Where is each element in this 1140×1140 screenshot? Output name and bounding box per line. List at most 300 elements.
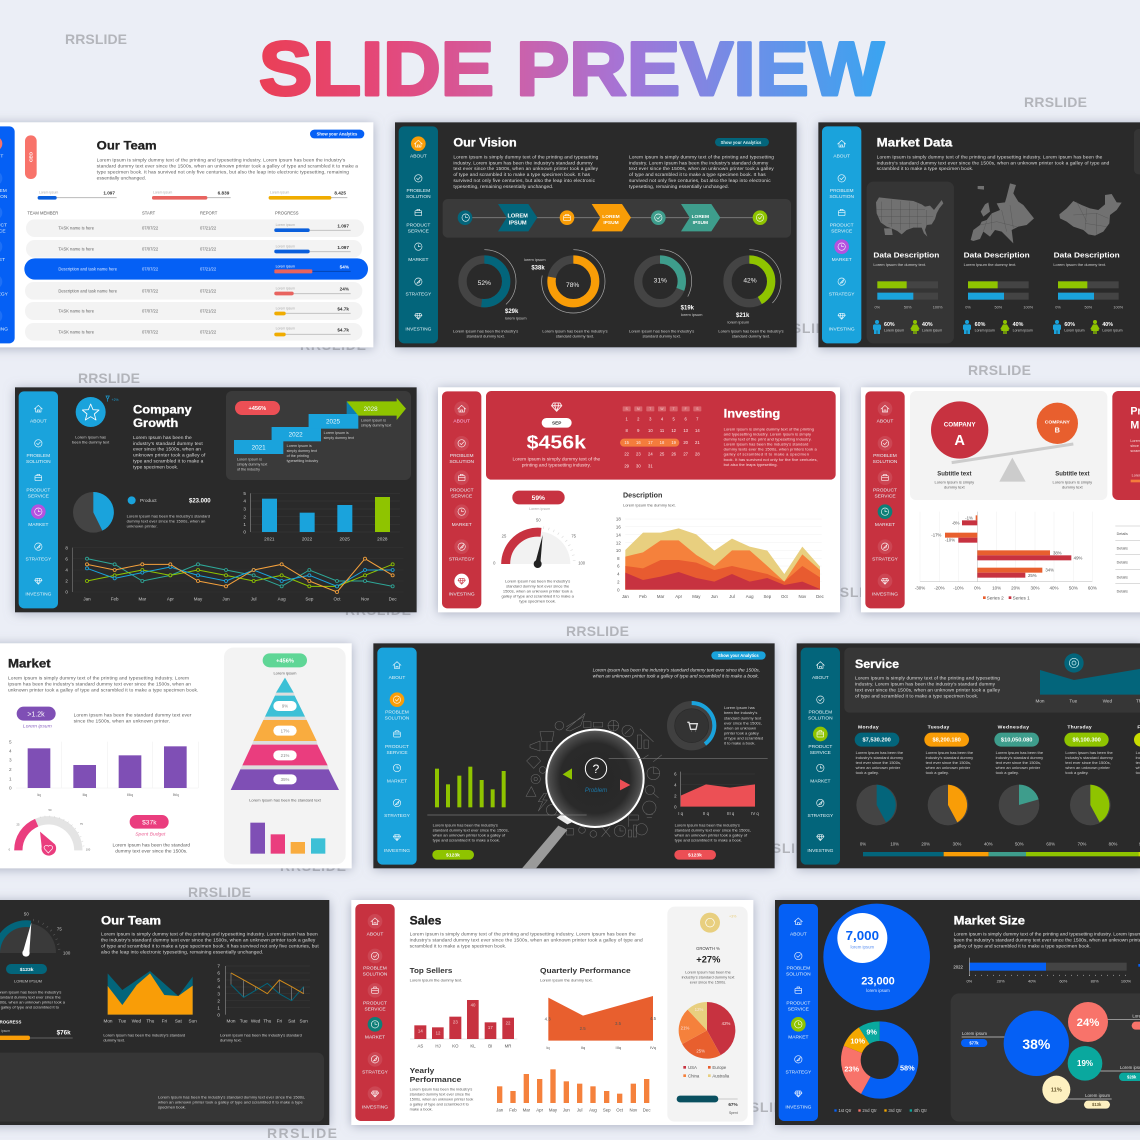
intro text	[97, 157, 358, 181]
sidebar: INVESTING	[807, 848, 834, 854]
data columns: 60%	[1064, 322, 1075, 328]
growth panel: 42%	[722, 1021, 730, 1026]
summary progress bars: 6.839	[218, 191, 230, 196]
bottom panel	[0, 1053, 324, 1122]
header panel	[844, 648, 1140, 713]
stacked area chart: Dec	[816, 594, 825, 599]
table rows: 07/21/22	[200, 247, 217, 252]
line chart: Oct	[334, 596, 341, 601]
intro text: the industry's standard dummy text ever since the 1500s, when an unknown printer took a galley	[101, 938, 316, 944]
quarterly area chart: 4.3	[545, 1017, 551, 1022]
bubble chart panel	[951, 993, 1140, 1122]
value pill	[17, 707, 56, 729]
intro text: unknown printer took a galley of	[133, 453, 206, 459]
intro text: Lorem Ipsum is simply dummy text of the printing and typesetting industry. Lorem Ipsum has been the	[410, 932, 636, 938]
line chart: Jan	[83, 596, 91, 601]
intro text: type and scrambled it to make a	[133, 459, 204, 465]
sidebar: SERVICE	[788, 1006, 810, 1012]
gauge: 50	[24, 911, 29, 916]
donut with cart icon	[669, 703, 714, 748]
donut chart: 10%	[850, 1037, 865, 1046]
intro text: Lorem Ipsum is simply dummy text of the printing and typesetting industry. Lorem Ipsum has been the industry's	[97, 157, 346, 163]
note: since the 1500s, when an unknown printer.	[74, 719, 170, 725]
sidebar: STRATEGY	[362, 1069, 389, 1075]
yearly bar chart: Dec	[643, 1107, 651, 1112]
header panel: Service	[855, 657, 899, 671]
data columns: 40%	[1102, 322, 1113, 328]
calendar: 8	[626, 428, 629, 433]
table rows: TASK name is here	[58, 330, 95, 335]
diverging bar chart: -30%	[915, 585, 925, 590]
gauge: Lorem Ipsum has been the industry's	[505, 579, 570, 584]
gauge: 100	[578, 561, 586, 566]
day columns: Tuesday	[928, 724, 950, 730]
data columns: 40%	[922, 322, 933, 328]
diverging bar chart: 25%	[1028, 573, 1037, 578]
line chart: 4	[217, 985, 220, 990]
intro text: essentially unchanged.	[97, 175, 146, 181]
data columns: Lorem ipsum	[1064, 328, 1085, 332]
donut note: ever since the 1500s,	[724, 720, 762, 725]
pyramid panel: Lorem ipsum	[273, 670, 297, 675]
bar chart: 2028	[377, 536, 388, 541]
calendar: 12	[671, 428, 677, 433]
watermarks: RRSLIDE	[345, 602, 411, 618]
sidebar: PRODUCT	[450, 488, 474, 494]
sidebar: SOLUTION	[363, 972, 388, 978]
gauge	[0, 911, 71, 957]
watermarks: RRSLIDE	[818, 584, 884, 600]
donut note: standard dummy text	[724, 715, 762, 720]
balance comparison panel: dummy text	[944, 485, 966, 490]
sidebar: PRODUCT	[873, 488, 897, 494]
sidebar: SOLUTION	[808, 715, 833, 721]
diverging bar chart: Series 1	[1013, 595, 1030, 600]
balance comparison panel: dummy text	[1062, 485, 1084, 490]
table rows: Lorem ipsum	[276, 244, 295, 248]
sidebar: ABOUT	[453, 419, 470, 425]
table header: START	[142, 210, 156, 215]
intro text: galley of type and scrambled it to make a type specimen book.	[954, 944, 1091, 950]
donut note	[724, 705, 763, 745]
balance comparison panel: Subtitle text	[1055, 472, 1089, 478]
table rows: $4.7k	[337, 328, 349, 333]
bar chart	[243, 491, 400, 541]
heading: Market Size	[954, 913, 1025, 927]
calendar: 31	[648, 463, 653, 468]
intro text: scrambled it to make a type specimen book.	[877, 166, 973, 172]
product legend: Lorem Ipsum has been the industry's standard	[127, 514, 210, 519]
progress scale: 80%	[1109, 842, 1117, 847]
stacked area chart: Jul	[729, 594, 735, 599]
gauge: 100	[86, 847, 91, 851]
sidebar: SERVICE	[451, 494, 473, 500]
balance comparison panel: Subtitle text	[937, 472, 971, 478]
summary progress bars	[38, 190, 347, 200]
calendar: 15	[624, 440, 630, 445]
value pill	[512, 491, 565, 511]
balance comparison panel: Lorem Ipsum is simply	[1053, 480, 1092, 485]
progress bar chart: 20%	[997, 978, 1005, 983]
line chart: Dec	[389, 596, 397, 601]
sidebar: PROBLEM	[830, 188, 853, 194]
magnifying glass	[522, 730, 644, 868]
sidebar: INVESTING	[405, 327, 432, 333]
diverging bar chart: 34%	[1045, 568, 1054, 573]
donut captions: standard dummy text.	[643, 334, 681, 339]
bubble chart panel: $13k	[1092, 1102, 1102, 1107]
line chart: 0	[217, 1012, 220, 1017]
donut charts: 31%	[654, 277, 667, 284]
balance comparison panel	[910, 391, 1107, 500]
donut note: when an unknown	[724, 725, 756, 730]
watermarks: RRSLIDE	[280, 858, 346, 874]
sidebar	[822, 126, 861, 343]
calendar: 4	[661, 416, 664, 421]
sidebar: SERVICE	[364, 1006, 386, 1012]
sidebar: SOLUTION	[406, 194, 431, 200]
stacked area chart: Sep	[763, 594, 772, 599]
growth panel: 21%	[681, 1025, 689, 1030]
donut charts: $29k	[505, 309, 519, 315]
italic intro	[593, 667, 760, 679]
diverging bar chart: 10%	[992, 585, 1001, 590]
timeline panel: IPSUM	[603, 220, 619, 226]
line chart: Aug	[278, 596, 286, 601]
panel: slide Market Data (dark)	[818, 122, 1140, 347]
bubble chart panel: Lorem ipsum	[962, 1031, 987, 1036]
heading: Growth	[133, 416, 178, 430]
line chart: Mar	[138, 596, 147, 601]
donut captions: standard dummy text.	[732, 334, 770, 339]
progress: $76k	[57, 1030, 71, 1037]
data columns: Lorem ipsum	[922, 328, 942, 332]
subheadings: Top Sellers	[410, 966, 452, 975]
sidebar: INVESTING	[872, 592, 898, 598]
investing text: Lorem Ipsum is simple dummy text of the printing	[724, 426, 814, 431]
main title: SLIDE PREVIEW	[259, 27, 884, 112]
panel: slide Investing (light)	[438, 387, 840, 612]
intro text: unknown printer took a galley of type and scrambled it to make a type specimen book.	[8, 687, 198, 693]
quarterly area chart: 4.5	[650, 1016, 657, 1021]
panel: slide Our Team (dark)	[0, 900, 329, 1125]
growth panel: ever since the 1500s.	[690, 980, 726, 984]
area chart	[674, 772, 759, 816]
bottom panel: Lorem Ipsum has been the industry's standard dummy text ever since the 1500s,	[158, 1095, 305, 1100]
day columns: took a galley.	[1065, 770, 1089, 775]
growth panel: Europe	[712, 1065, 727, 1070]
yearly bar chart: Sep	[603, 1107, 611, 1112]
sidebar: PRODUCT	[808, 744, 832, 750]
day columns: text ever since the 1500s,	[996, 760, 1041, 765]
watermarks: RRSLIDE	[750, 840, 816, 856]
intro text	[8, 675, 198, 693]
bar chart: 1	[243, 522, 246, 527]
donut charts: 78%	[566, 282, 579, 289]
diverging bar chart: 20%	[1011, 585, 1020, 590]
sidebar: INVESTING	[829, 327, 855, 333]
top sellers bar chart: 22	[506, 1020, 511, 1025]
timeline panel: IPSUM	[509, 221, 527, 227]
intro text: of type and scrambled it to make a type specimen book. It has survived not only five centuries, but	[101, 944, 319, 950]
day columns: took a galley.	[996, 770, 1019, 775]
map: USA	[876, 197, 943, 237]
day columns: Thursday	[1067, 724, 1092, 730]
day columns: text ever since the 1500s,	[926, 760, 971, 765]
yearly performance text	[410, 1066, 473, 1111]
analytics pill: Show your Analytics	[721, 140, 762, 145]
header panel: Mon	[1035, 699, 1045, 704]
growth staircase panel: simply dummy text	[237, 463, 267, 467]
intro text: Ipsum has been the industry's standard dummy text ever since the 1500s, when an	[8, 681, 191, 687]
area chart: Thu	[146, 1019, 155, 1024]
gauge: 75	[80, 822, 83, 826]
timeline panel: LOREM	[692, 214, 709, 220]
red header panel: printing and typesetting industry.	[522, 462, 591, 468]
day columns: when an unknown printer	[1065, 765, 1111, 770]
line chart: 6	[217, 971, 220, 976]
clipped red panel: M	[1130, 419, 1139, 431]
bubble chart panel: 38%	[1022, 1036, 1051, 1052]
intro text: ever since the 1500s, when an	[133, 447, 201, 453]
pyramid panel	[224, 648, 346, 864]
watermarks: RRSLIDE	[566, 623, 629, 639]
area chart	[103, 971, 197, 1043]
panel: slide Sales (light)	[351, 900, 753, 1125]
stacked area chart: Jun	[711, 594, 718, 599]
donut captions	[453, 329, 784, 339]
data columns: 0%	[1055, 305, 1061, 309]
sidebar: SOLUTION	[873, 459, 898, 465]
table rows: Lorem ipsum	[276, 326, 295, 330]
sidebar: SOLUTION	[786, 972, 811, 978]
calendar: 16	[636, 440, 641, 445]
yearly performance text: Lorem Ipsum has been the industry's	[410, 1087, 472, 1091]
donut chart: 58%	[900, 1063, 915, 1072]
intro text: industry's standard dummy text ever since the 1500s, when an unknown printer took a galley of type and	[410, 938, 643, 944]
top sellers bar chart	[410, 1000, 517, 1048]
donut note: been the industry's	[724, 710, 757, 715]
budget pill: $37k	[142, 819, 157, 826]
analytics pill	[711, 651, 766, 660]
yearly bar chart: Feb	[509, 1107, 517, 1112]
red header panel: $456k	[527, 431, 587, 452]
growth staircase panel: Lorem Ipsum is	[324, 431, 349, 435]
summary progress bars: Lorem ipsum	[153, 190, 172, 194]
note: Lorem Ipsum has been the standard dummy text ever	[74, 713, 192, 719]
calendar: F	[685, 407, 687, 411]
bubble chart panel: 19%	[1077, 1059, 1093, 1068]
yearly performance text: Performance	[410, 1075, 461, 1084]
text columns: typesetting, remaining essentially unchanged.	[629, 184, 729, 190]
line chart: 1	[217, 1005, 220, 1010]
intro text: type specimen book. It has survived not only five centuries, but also the leap into electronic typesetting, remaining	[97, 169, 349, 175]
yearly bar chart: Mar	[523, 1107, 531, 1112]
panel: slide Market Size (dark)	[775, 900, 1140, 1125]
top sellers bar chart: KL	[470, 1043, 476, 1048]
stacked area chart: 14	[616, 532, 621, 537]
top sellers bar chart: 14	[418, 1028, 423, 1033]
sidebar: INVESTING	[785, 1104, 812, 1110]
donut legend: 2nd Qtr	[862, 1108, 877, 1113]
calendar: M	[637, 407, 640, 411]
big nested circles: lorem ipsum	[866, 988, 890, 993]
right note with pill: Lorem Ipsum has been the industry's	[675, 823, 740, 828]
sidebar: PRODUCT	[26, 488, 50, 494]
table header: PROGRESS	[275, 211, 299, 216]
table header: TEAM MEMBER	[27, 210, 58, 215]
sidebar: PRODUCT	[363, 1000, 387, 1006]
sidebar: MARKET	[365, 1035, 385, 1041]
sidebar: MARKET	[387, 778, 407, 784]
diverging bar chart: 30%	[1031, 585, 1039, 590]
sidebar: MARKET	[788, 1035, 808, 1041]
right note with pill	[674, 823, 751, 860]
investing text: and typesetting industry. Lorem Ipsum is simply	[724, 431, 811, 436]
balance comparison panel: B	[1055, 425, 1060, 434]
watermarks: RRSLIDE	[188, 884, 251, 900]
gauge: 1500s, when an unknown printer took a	[503, 589, 573, 594]
investing text	[724, 426, 818, 467]
intro text: standard dummy text ever since the 1500s, when an unknown printer took a galley of type and scrambled it to make a	[97, 163, 358, 169]
pie chart	[73, 492, 114, 533]
investing text: but also the leaps typesetting.	[724, 462, 778, 467]
data columns: Lorem Ipsum the dummy text.	[1053, 262, 1106, 267]
calendar: T	[649, 407, 651, 411]
bubble chart panel: $77k	[969, 1040, 979, 1045]
sidebar: PROBLEM	[27, 453, 50, 459]
quarterly area chart	[545, 996, 657, 1050]
calendar: 27	[683, 452, 689, 457]
donut note: Lorem Ipsum has	[724, 705, 755, 710]
big nested circles: 23,000	[861, 975, 895, 987]
table rows: 07/21/22	[200, 267, 217, 272]
bar chart: 1	[9, 776, 12, 781]
table rows: Lorem ipsum	[276, 264, 295, 268]
red header panel: SEP	[552, 421, 561, 426]
donut charts: lorem ipsum	[681, 312, 703, 317]
sidebar: SOLUTION	[829, 194, 855, 200]
progress scale: 30%	[953, 842, 961, 847]
sidebar: ABOUT	[877, 419, 893, 425]
big nested circles	[823, 904, 930, 1010]
right note with pill: $123k	[688, 853, 702, 859]
summary progress bars: 8.425	[334, 191, 346, 196]
day columns: $7,530.200	[863, 738, 891, 744]
investing text: book. It has survived not only for the five centuries,	[724, 457, 818, 462]
intro text: Lorem Ipsum is simply dummy text of the printing and typesetting industry. Lorem Ipsum has been	[101, 932, 318, 938]
value pill: 59%	[532, 495, 545, 502]
gauge: 25	[502, 534, 507, 539]
data columns: Data Description	[873, 251, 940, 260]
table rows: TASK name is here	[58, 225, 95, 230]
bubble chart panel: Lorem ipsum	[1085, 1093, 1111, 1098]
heading: Our Team	[97, 139, 157, 153]
donut charts: lorem ipsum	[505, 316, 527, 321]
table rows: 54%	[340, 264, 350, 269]
gauge note	[0, 989, 66, 1009]
donut legend	[834, 1108, 927, 1113]
growth panel: industry's standard dummy text	[682, 975, 735, 979]
subheadings	[410, 966, 631, 982]
text columns: industry. Lorem Ipsum has been the industry's standard dummy	[453, 160, 593, 166]
sidebar: ABOUT	[812, 675, 829, 681]
progress scale: 70%	[1078, 842, 1086, 847]
sidebar: SOLUTION	[385, 715, 410, 721]
value pill: >1.2k	[27, 712, 45, 719]
top sellers bar chart: MR	[505, 1043, 511, 1048]
yearly performance text: make a book.	[410, 1107, 433, 1111]
stacked area chart: 0	[617, 587, 620, 592]
growth panel: China	[688, 1073, 700, 1078]
sidebar: MARKET	[810, 778, 830, 784]
calendar: S	[696, 407, 699, 411]
left note with pill	[432, 823, 509, 860]
donut captions: standard dummy text.	[556, 334, 594, 339]
calendar: 17	[648, 440, 653, 445]
area chart: dummy text.	[103, 1038, 125, 1043]
growth staircase panel: 2025	[326, 419, 341, 426]
heading: Our Vision	[453, 136, 517, 150]
magnifying glass: ?	[593, 762, 600, 776]
sidebar: MARKET	[408, 257, 428, 263]
diverging bar chart: -20%	[934, 585, 945, 590]
bar chart: 4	[9, 748, 12, 753]
table header	[27, 210, 299, 216]
intro text	[101, 932, 319, 956]
clipped red panel	[1112, 391, 1140, 500]
sidebar: STRATEGY	[405, 292, 432, 298]
progress scale: 0%	[860, 842, 866, 847]
balance comparison panel: COMPANY	[1045, 419, 1071, 425]
growth panel: 25%	[696, 1049, 705, 1054]
data columns: Lorem Ipsum the dummy text.	[873, 262, 926, 267]
area chart: Lorem Ipsum has been the industry's standard	[103, 1033, 185, 1038]
product legend: unknown printer.	[127, 524, 158, 529]
sidebar: STRATEGY	[807, 813, 834, 819]
gauge: galley of type and scrambled it to make a	[501, 594, 575, 599]
heading: Market	[8, 657, 51, 671]
diverging bar chart: -17%	[931, 533, 942, 538]
table rows: 07/21/22	[200, 289, 217, 294]
balance comparison panel: Lorem Ipsum is simply	[935, 480, 974, 485]
quarterly area chart: 2.5	[580, 1026, 586, 1031]
line chart: dummy text.	[220, 1038, 242, 1043]
sidebar	[377, 648, 417, 865]
line chart: Mon	[226, 1019, 236, 1024]
data columns: 50%	[1084, 305, 1093, 309]
intro text	[133, 435, 206, 471]
day columns: $10,050.080	[1001, 738, 1032, 744]
header panel: text ever since the 1500s, when an unknown printer took a galley	[855, 688, 1001, 694]
summary progress bars: Lorem ipsum	[39, 190, 58, 194]
calendar: 6	[685, 416, 688, 421]
yearly bar chart: May	[549, 1107, 558, 1112]
quarterly area chart: 3.5	[615, 1021, 622, 1026]
details table: Details	[1117, 532, 1128, 536]
intro text: industry's standard dummy text ever since the 1500s, when an unknown printer took a galley of type and	[877, 160, 1110, 166]
data columns: Lorem ipsum	[1013, 328, 1033, 332]
subheadings: Lorem Ipsum the dummy text.	[410, 977, 462, 982]
bar chart: 5	[243, 491, 246, 496]
day columns: industry's standard dummy	[856, 755, 903, 760]
sidebar: SERVICE	[28, 494, 50, 500]
heading: Company	[133, 403, 192, 417]
gauge value pill: $123k	[20, 967, 34, 973]
donut charts: $19k	[681, 305, 695, 311]
data columns: 60%	[884, 322, 895, 328]
intro text: Lorem Ipsum is simply dummy text of the printing and typesetting industry. Lorem Ipsum has been the	[877, 154, 1103, 160]
